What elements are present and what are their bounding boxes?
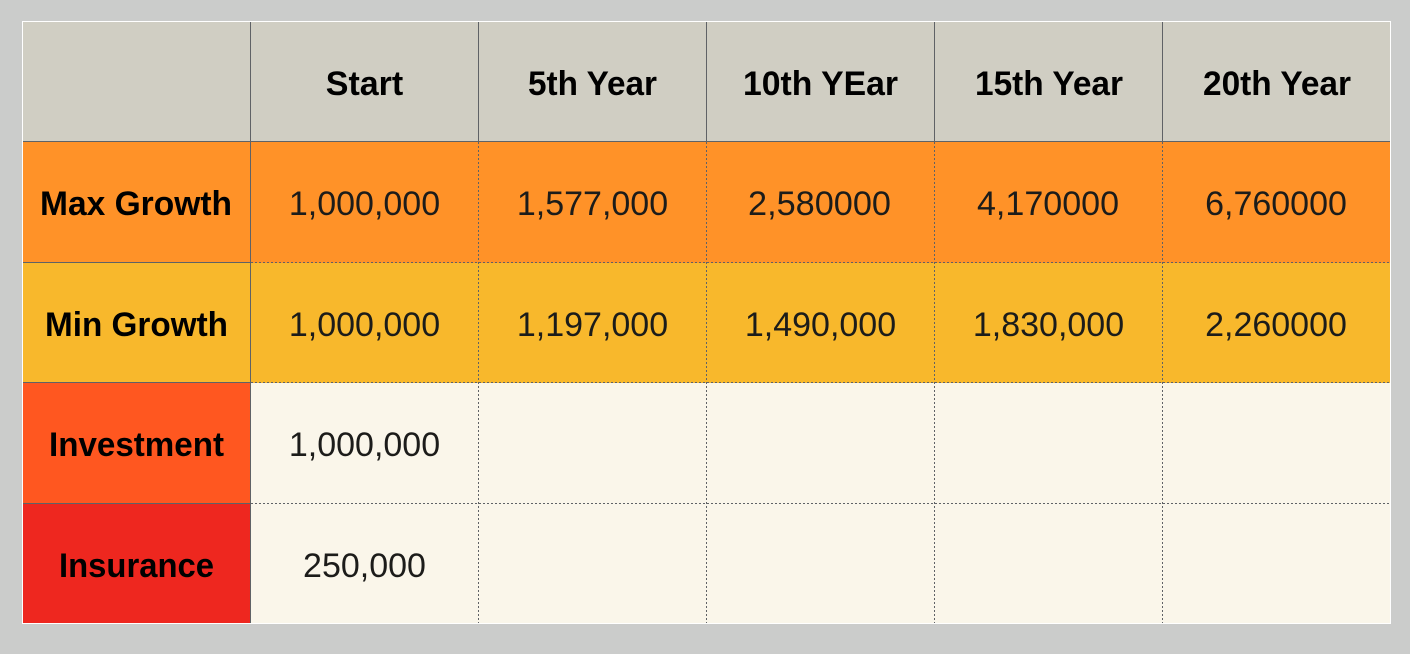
header labels: Start: [326, 65, 403, 103]
investment value: 1,000,000: [289, 426, 440, 464]
empty cream body cells: [251, 383, 1390, 623]
row labels: [40, 185, 232, 585]
min growth values: 1,197,000: [517, 306, 668, 344]
min growth values: 2,260000: [1205, 306, 1347, 344]
header labels: 20th Year: [1203, 65, 1351, 103]
max growth values: 6,760000: [1205, 185, 1347, 223]
min growth values: 1,490,000: [745, 306, 896, 344]
insurance label cell: [23, 503, 251, 623]
insurance value: 250,000: [303, 547, 426, 585]
min growth values: [289, 306, 1347, 344]
min growth values: 1,000,000: [289, 306, 440, 344]
header row background: [23, 22, 1390, 142]
row labels: Investment: [49, 426, 224, 464]
max growth values: 1,000,000: [289, 185, 440, 223]
max growth row background: [23, 142, 1390, 263]
row labels: Min Growth: [45, 306, 228, 344]
header labels: [326, 65, 1351, 103]
max growth values: [289, 185, 1347, 223]
row labels: Max Growth: [40, 185, 232, 223]
min growth row background: [23, 263, 1390, 383]
max growth values: 4,170000: [977, 185, 1119, 223]
header labels: 5th Year: [528, 65, 657, 103]
header labels: 15th Year: [975, 65, 1123, 103]
max growth values: 2,580000: [748, 185, 891, 223]
header labels: 10th YEar: [743, 65, 898, 103]
max growth values: 1,577,000: [517, 185, 668, 223]
min growth values: 1,830,000: [973, 306, 1124, 344]
investment label cell: [23, 383, 251, 503]
row labels: Insurance: [59, 547, 214, 585]
